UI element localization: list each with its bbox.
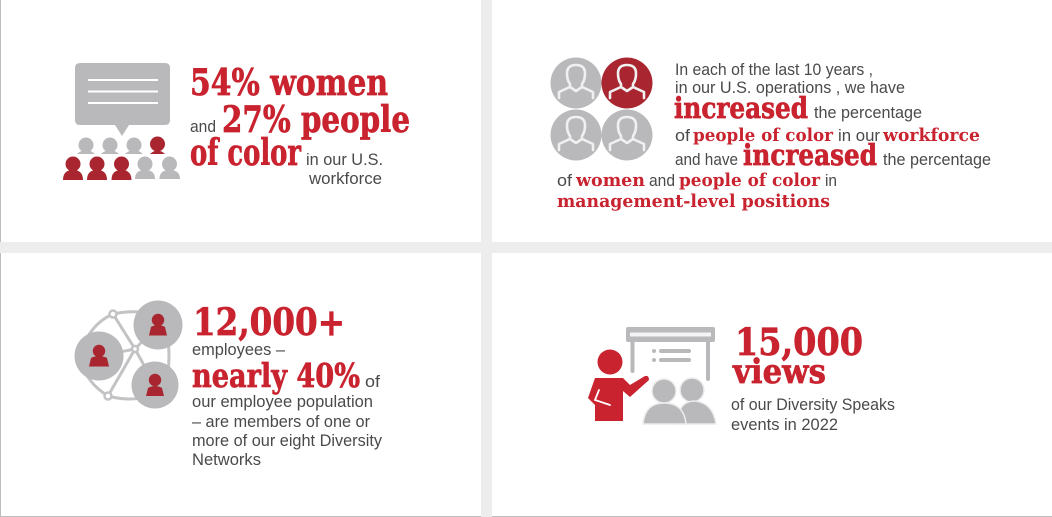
text: 54% women and 27% people of color: of color [190,132,302,174]
text: ten-year statement: people of color [693,125,833,146]
text: 12,000+ employees: 12,000+ [193,300,345,344]
icon: presenter and audience [588,327,716,424]
text: 54% women and 27% people of color: and [190,117,216,136]
panel: women and people of color share [63,62,410,188]
text: 54% women and 27% people of color: 54% women [190,62,388,104]
text: ten-year statement: and [649,171,675,190]
text: 12,000+ employees: of [365,372,380,391]
text: ten-year statement: in our [838,126,880,145]
text: ten-year statement: the percentage [883,150,991,169]
text: 15,000 views: 15,000 [735,320,863,364]
text: ten-year statement [557,60,991,212]
icon: speech bubble and audience [63,63,180,180]
text: ten-year statement: in our U.S. operations , we have [675,78,905,97]
text: 12,000+ employees [192,300,382,469]
text: 12,000+ employees: more of our eight Diversity [192,431,382,450]
text: 12,000+ employees: Networks [192,450,261,469]
text: ten-year statement: the percentage [814,103,922,122]
text: 15,000 views: views [732,352,826,392]
text: ten-year statement: women [575,170,645,191]
text: 12,000+ employees: – are members of one or [192,412,370,431]
text: ten-year statement: people of color [679,170,820,191]
icon: four person circles [550,58,652,160]
text: ten-year statement: in [825,171,837,190]
text: ten-year statement: of [557,171,572,190]
text: 15,000 views: of our Diversity Speaks [731,395,895,414]
text: 54% women and 27% people of color: workforce [308,169,382,188]
text: 15,000 views: events in 2022 [731,415,838,434]
text: 54% women and 27% people of color: in our U.S. [306,150,383,169]
text: 15,000 views [731,320,895,434]
text: 12,000+ employees: our employee population [192,392,373,411]
text: 12,000+ employees: employees – [192,340,286,359]
text: 12,000+ employees: nearly 40% [192,356,360,395]
text: 54% women and 27% people of color: 27% people [222,99,410,141]
panel: diversity networks [74,300,382,469]
text: ten-year statement: of [675,126,690,145]
text: ten-year statement: management-level positions [557,191,830,212]
panel: ten years of increases [550,58,991,212]
panel: Diversity Speaks views [588,320,895,434]
icon: connected network of people [74,300,182,408]
text: ten-year statement: increased [743,138,877,172]
text: ten-year statement: workforce [882,125,980,146]
text: ten-year statement: In each of the last 10 years , [675,60,873,79]
text: 54% women and 27% people of color [190,62,410,188]
text: ten-year statement: and have [675,150,738,169]
text: ten-year statement: increased [674,91,808,125]
